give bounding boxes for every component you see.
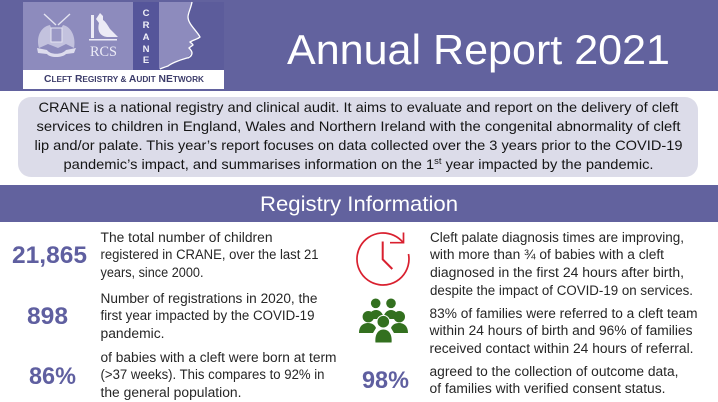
text: diagnosis times: diagnosed in the first 24 hours after birth,: [430, 265, 684, 280]
stat: born at term: (>37 weeks). This compares to 92% in: [100, 367, 324, 382]
stat: born at term: of babies with a cleft were born at term: [100, 350, 336, 365]
intro panel: lip and/or palate. This year’s report focuses on data collected over the 3 years prior to the COVID-19: [34, 137, 683, 153]
stat: outcome data consent: [362, 364, 678, 396]
stat: total registered: years, since 2000.: [100, 265, 204, 280]
crest: [37, 14, 76, 57]
stat: total registered: 21,865: [12, 242, 87, 269]
CRANE vertical text: R: [143, 20, 150, 31]
intro panel: services to children in England, Wales and Northern Ireland with the congenital abnormality of cleft: [36, 118, 681, 134]
text: diagnosis times: despite the impact of COVID-19 on services.: [430, 283, 693, 298]
stat: total registered: [12, 230, 318, 280]
logo caption: CLEFT REGISTRY & AUDIT NETWORK: [44, 74, 204, 85]
text: diagnosis times: with more than ¾ of babies with a cleft: [429, 247, 664, 262]
stat: 2020 registrations: pandemic.: [100, 326, 164, 341]
text: referrals: within 24 hours of birth and 96% of families: [428, 323, 693, 338]
intro panel: st: [434, 156, 442, 166]
stat: born at term: 86%: [29, 363, 76, 390]
stat: outcome data consent: agreed to the collection of outcome data,: [430, 364, 678, 379]
stat: 2020 registrations: 898: [27, 303, 68, 330]
text: referrals: received contact within 24 hours of referral.: [430, 341, 694, 356]
icon: clock: [357, 232, 409, 285]
stat: outcome data consent: 98%: [362, 367, 409, 394]
title: Annual Report 2021: [287, 26, 670, 73]
stat: total registered: registered in CRANE, over the last 21: [100, 247, 318, 262]
stat: 2020 registrations: first year impacted by the COVID-19: [100, 308, 314, 323]
stat: total registered: The total number of children: [100, 230, 272, 245]
CRANE vertical text: A: [143, 32, 150, 43]
section heading band: [0, 185, 718, 222]
CRANE vertical text: C: [143, 8, 150, 19]
logo: [23, 2, 224, 89]
stat: 2020 registrations: Number of registrations in 2020, the: [100, 291, 318, 306]
CRANE vertical text: E: [143, 55, 149, 66]
CRANE vertical text: [143, 8, 150, 66]
stat: born at term: [29, 350, 336, 400]
text: diagnosis times: Cleft palate diagnosis times are improving,: [430, 230, 684, 245]
intro panel: [18, 97, 698, 177]
RCS emblem: [89, 13, 118, 60]
intro panel: CRANE is a national registry and clinical audit. It aims to evaluate and report on the delivery of cleft: [38, 99, 679, 115]
stat: outcome data consent: of families with verified consent status.: [430, 381, 666, 396]
CRANE vertical text: N: [143, 44, 150, 55]
RCS label: RCS: [90, 44, 117, 60]
intro panel: year impacted by the pandemic.: [442, 156, 654, 172]
stat: 2020 registrations: [27, 291, 318, 341]
header band: [0, 0, 718, 91]
intro panel: pandemic’s impact, and summarises information on the 1: [64, 156, 417, 172]
icon: group of people: [359, 298, 408, 343]
text: referrals: 83% of families were referred to a cleft team: [430, 306, 698, 321]
stat: born at term: the general population.: [100, 385, 242, 400]
text: referrals: [428, 306, 698, 356]
section heading band: Registry Information: [260, 193, 458, 216]
text: diagnosis times: [429, 230, 693, 298]
